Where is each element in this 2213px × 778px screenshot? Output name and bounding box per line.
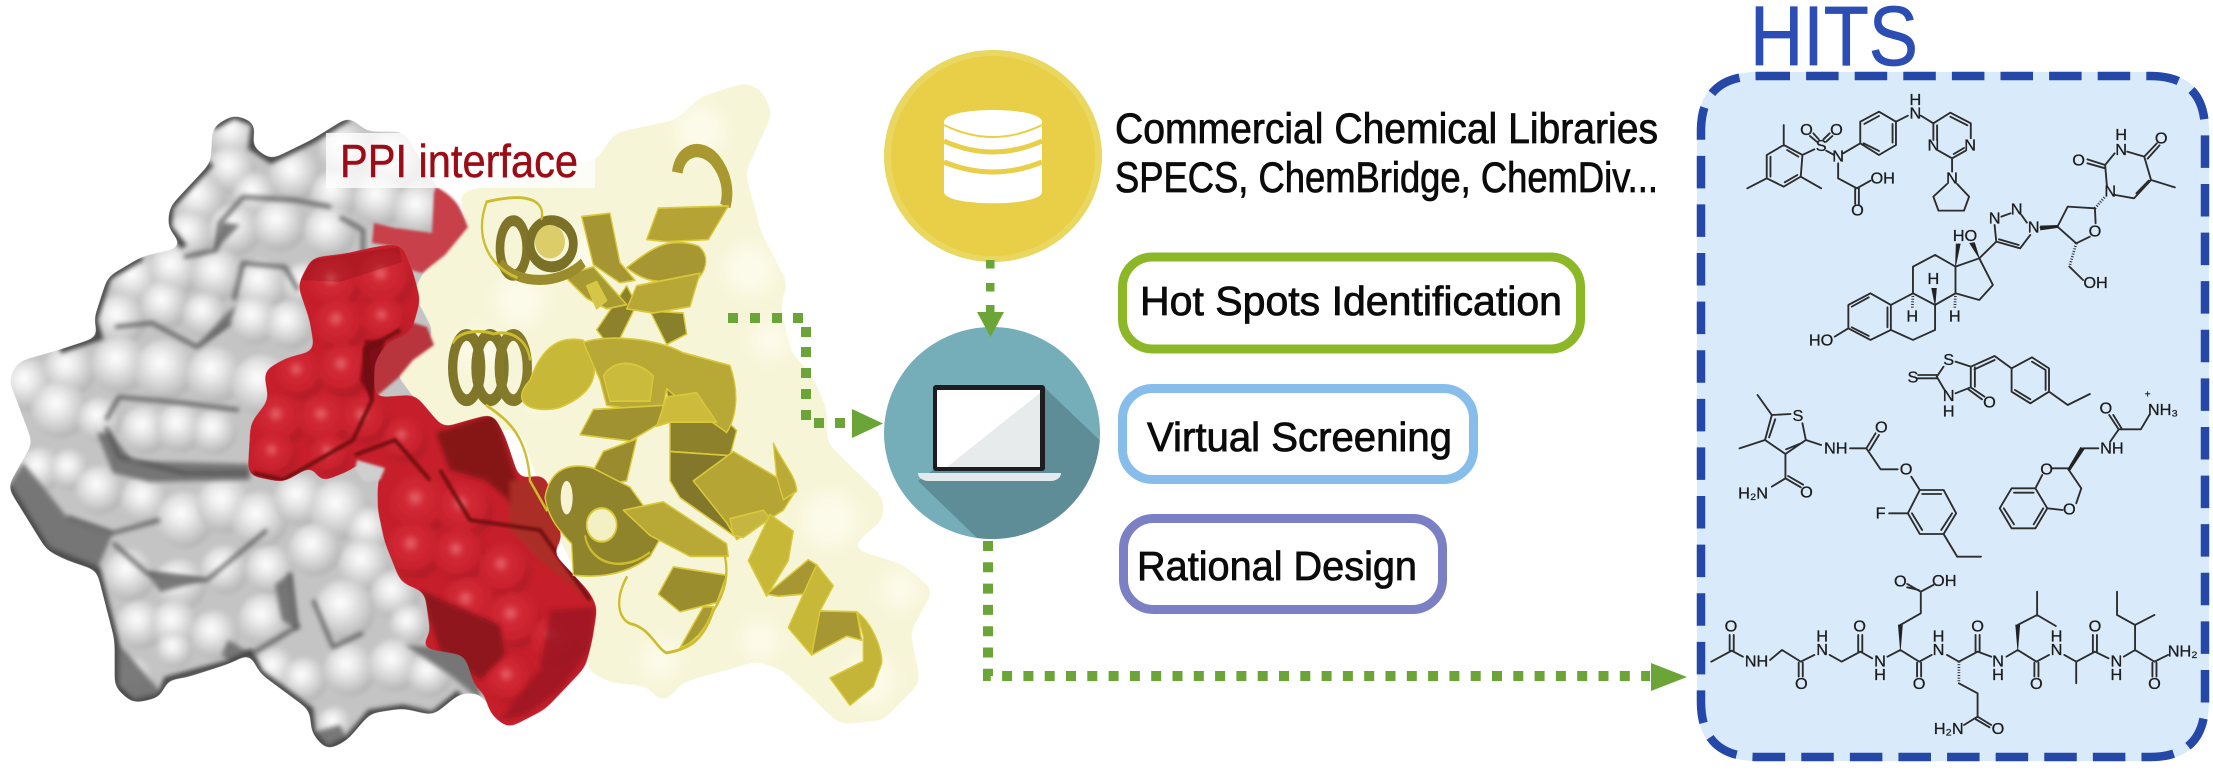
molecule: peptide: H [1816, 628, 1828, 646]
molecule: steroid triazole nucleoside: N [1989, 209, 2000, 227]
molecule: peptide: O [2089, 618, 2101, 636]
pill: hot spots identification [1122, 257, 1580, 349]
molecule: peptide: H [1874, 666, 1886, 684]
molecule: benzodioxane glycinamide: NH [2100, 439, 2124, 457]
icon: database circle [884, 50, 1102, 262]
molecule: peptide [1711, 572, 2198, 738]
ribbon: thin lower loop [619, 556, 726, 653]
molecule: sulfonamide pyrimidine: O [1800, 121, 1813, 139]
molecule: peptide: O [1894, 573, 1907, 591]
molecule: peptide: NH [1745, 653, 1768, 671]
molecule: peptide: N [1874, 653, 1886, 671]
molecule: steroid triazole nucleoside: O [2089, 223, 2101, 241]
molecule: steroid triazole nucleoside: N [2028, 218, 2040, 236]
ribbon: top helix [627, 151, 728, 313]
molecule: thiophene carboxamide: O [1800, 484, 1813, 502]
pill: virtual screening: Virtual Screening [1147, 414, 1452, 460]
label backing and text: PPI interface: PPI interface [340, 135, 578, 187]
text: chemical libraries [1115, 105, 1658, 202]
molecule: sulfonamide pyrimidine: N [1909, 104, 1921, 122]
molecule: peptide: H [2110, 666, 2122, 684]
molecule: thiophene carboxamide [1738, 395, 1981, 557]
arrow: database to laptop [977, 260, 1004, 337]
molecule: peptide: OH [1932, 572, 1956, 590]
panel: hits box [1701, 76, 2205, 757]
pill: rational design [1124, 518, 1442, 610]
molecule: peptide: O [1725, 618, 1737, 636]
molecule: sulfonamide pyrimidine: N [1964, 137, 1976, 155]
molecule: peptide: O [1992, 720, 2004, 738]
ribbon: lower sheets [623, 502, 728, 648]
molecule: steroid triazole nucleoside: N [2115, 141, 2127, 159]
ribbon: right sheet with spike [693, 443, 797, 540]
gray protein surface [10, 116, 487, 748]
molecule: sulfonamide pyrimidine: H [1909, 91, 1921, 109]
molecule: steroid triazole nucleoside: H [1927, 270, 1939, 288]
molecule: benzodioxane glycinamide: O [2099, 399, 2112, 417]
molecule: peptide: O [2030, 675, 2043, 693]
molecule: sulfonamide pyrimidine: O [1830, 121, 1843, 139]
molecule: benzodioxane glycinamide: O [2040, 460, 2053, 478]
ribbon: central core pieces [563, 213, 737, 535]
pill: virtual screening [1122, 388, 1474, 480]
molecule: thiophene carboxamide: F [1876, 504, 1886, 522]
molecule: benzodioxane glycinamide: NH₃ [2148, 401, 2178, 419]
molecule: peptide: O [1795, 675, 1808, 693]
molecule: thiophene carboxamide: O [1900, 460, 1913, 478]
molecule: peptide: NH₂ [2168, 643, 2198, 661]
molecule: peptide: O [1853, 618, 1866, 636]
interface patch: upper pale red [372, 187, 468, 273]
ribbon: upper-left coil [482, 198, 583, 280]
interface patch: main red surface [240, 240, 610, 740]
molecule: peptide: H [2051, 628, 2062, 646]
molecule: steroid triazole nucleoside: HO [1809, 332, 1833, 350]
molecule: sulfonamide pyrimidine: O [1851, 202, 1864, 220]
molecule: peptide: N [1992, 653, 2004, 671]
molecule: thiophene carboxamide: O [1875, 418, 1888, 436]
molecule: thiophene carboxamide: S [1793, 407, 1804, 425]
molecule: steroid triazole nucleoside: HO [1953, 227, 1977, 245]
arrow: protein to laptop [728, 313, 883, 438]
molecule: sulfonamide pyrimidine: S [1816, 137, 1827, 155]
ribbon: long terminal helix [748, 514, 882, 705]
molecule: benzodioxane glycinamide: O [2063, 500, 2076, 518]
molecule: sulfonamide pyrimidine: N [1832, 148, 1844, 166]
molecule: benzylidene rhodanine: N [1943, 387, 1955, 405]
molecule: peptide: O [2148, 675, 2161, 693]
molecule: benzylidene rhodanine [1908, 351, 2090, 421]
molecule: benzylidene rhodanine: S [1908, 368, 1919, 386]
molecule: peptide: O [1913, 675, 1925, 693]
panel: protein complex [0, 83, 933, 770]
molecule: steroid triazole nucleoside: H [1906, 308, 1918, 326]
molecule: peptide: H [1933, 628, 1944, 646]
molecule: peptide: H₂N [1934, 720, 1964, 738]
translucent yellow partner surface [395, 83, 933, 724]
molecule: steroid triazole nucleoside: H [2115, 126, 2127, 144]
molecule: peptide: N [2110, 653, 2122, 671]
pill: hot spots identification: Hot Spots Identification [1140, 278, 1562, 324]
ribbon: central sheets [522, 338, 736, 489]
molecule: steroid triazole nucleoside: O [2072, 152, 2085, 170]
molecule: peptide: N [1816, 641, 1828, 659]
molecule: benzylidene rhodanine: O [1983, 394, 1996, 412]
hit molecules, upper part [1747, 91, 2175, 350]
pill: rational design: Rational Design [1137, 543, 1417, 589]
molecule: steroid triazole nucleoside [1809, 126, 2175, 350]
ribbon: mid-left coil [453, 331, 547, 510]
molecule: benzodioxane glycinamide: + [2145, 390, 2151, 400]
text: chemical libraries: Commercial Chemical Libraries [1115, 105, 1658, 153]
molecule: peptide: O [1971, 618, 1984, 636]
molecule: sulfonamide pyrimidine: N [1946, 169, 1958, 187]
molecule: sulfonamide pyrimidine [1747, 91, 1976, 220]
molecule: peptide: N [1933, 641, 1944, 659]
arrow: laptop to hits [988, 541, 1687, 691]
molecule: sulfonamide pyrimidine: N [1927, 137, 1939, 155]
molecule: thiophene carboxamide: H₂N [1738, 484, 1768, 502]
ribbon: lower-left coil [545, 466, 663, 576]
molecule: benzylidene rhodanine: S [1943, 351, 1954, 369]
text: chemical libraries: SPECS, ChemBridge, ChemDiv... [1115, 154, 1658, 202]
hits box dashed border [1701, 76, 2205, 757]
molecule: sulfonamide pyrimidine: OH [1870, 169, 1895, 187]
molecule: steroid triazole nucleoside: OH [2083, 274, 2108, 292]
icon: laptop circle [884, 327, 1100, 539]
molecule: benzodioxane glycinamide [2000, 390, 2178, 528]
gold ribbon cartoon [453, 151, 882, 705]
white patch inside interface [355, 460, 385, 482]
molecule: steroid triazole nucleoside: O [2155, 129, 2168, 147]
molecule: peptide: N [2051, 641, 2062, 659]
molecule: peptide: H [1992, 666, 2004, 684]
molecule: thiophene carboxamide: NH [1824, 439, 1848, 457]
molecule: steroid triazole nucleoside: N [2011, 200, 2023, 218]
interface patch: middle pale red [372, 320, 434, 400]
molecule: steroid triazole nucleoside: N [2104, 183, 2116, 201]
molecule: benzylidene rhodanine: H [1943, 403, 1955, 421]
molecule: steroid triazole nucleoside: H [1949, 308, 1961, 326]
